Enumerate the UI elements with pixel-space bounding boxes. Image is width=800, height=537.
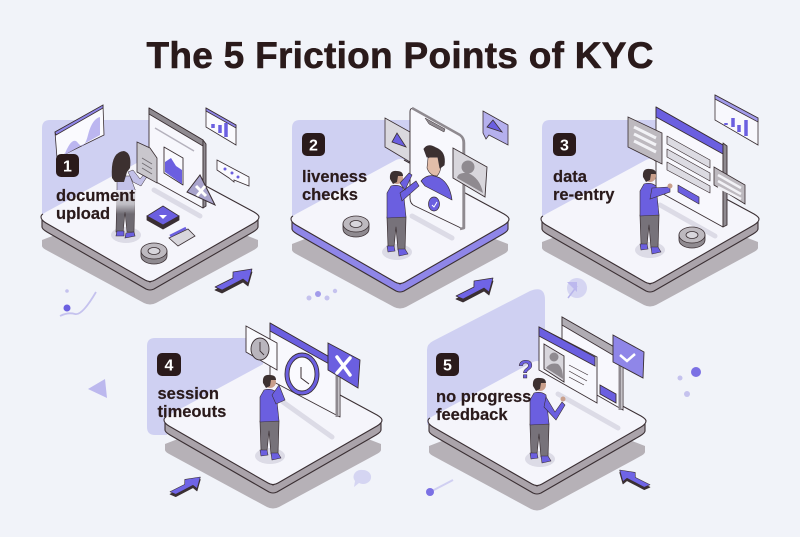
icon: chat bubble (217, 160, 249, 186)
platform 1 (41, 157, 259, 304)
arrow 5 (620, 470, 650, 490)
phone with face (410, 108, 464, 229)
step 3 badge (553, 133, 576, 156)
panel: step 5 no progress feedback (427, 289, 650, 510)
step 4 label: session (158, 385, 219, 403)
check badge (428, 197, 440, 211)
step 2 label (302, 168, 367, 204)
panel: step 1 document upload (41, 105, 259, 304)
step 3 badge: 3 (560, 138, 569, 154)
decoration: dots (306, 289, 337, 300)
icon: left form card (628, 117, 662, 164)
lavender backdrop 5 (427, 289, 545, 425)
step 1 label (56, 187, 135, 223)
window with clock (270, 323, 340, 417)
icon: ring 3 (679, 227, 705, 248)
front profile window (539, 327, 597, 403)
figure: man with question (518, 356, 566, 467)
user portrait (421, 146, 452, 200)
decoration: pie shape (567, 278, 587, 298)
lavender backdrop 2 (292, 120, 410, 222)
icon: image scan card (385, 118, 410, 162)
arm (650, 187, 670, 199)
shadow under form (660, 205, 715, 236)
platform 3 (541, 159, 759, 306)
decoration: dots right (678, 367, 701, 397)
step 5 label: feedback (436, 406, 508, 424)
icon: small clock card (246, 326, 277, 370)
step 4 badge: 4 (165, 358, 174, 374)
panel: step 3 data re-entry (541, 95, 759, 306)
step 4 badge (157, 353, 181, 376)
icon: X card (328, 343, 360, 388)
arrow 1 (215, 269, 252, 293)
shadow under window (283, 402, 332, 437)
arm (272, 385, 285, 404)
step 4 label (158, 385, 226, 421)
step 2 label: checks (302, 186, 358, 204)
step 5 badge: 5 (443, 358, 452, 374)
icon: ring 2 (343, 216, 369, 237)
decoration: bubble (353, 470, 371, 487)
icon: floating area chart (55, 105, 104, 158)
platform 2 (291, 159, 509, 308)
platform 4 (164, 360, 382, 508)
icon: bar card (206, 108, 236, 145)
step 5 label (436, 388, 531, 424)
platform 5 (428, 361, 646, 510)
lavender backdrop 3 (542, 120, 656, 218)
icon: browser window with image (149, 108, 206, 208)
step 3 label: data (553, 168, 588, 186)
step 1 label: document (56, 187, 135, 205)
question mark: ? (518, 356, 533, 384)
shadow under windows (558, 394, 618, 428)
icon: profile card (453, 148, 487, 197)
figure: man thinking (255, 375, 285, 464)
arrow 4 (170, 477, 200, 497)
lavender backdrop 4 (147, 338, 263, 435)
icon: purple upload tile (147, 206, 179, 229)
step 2 label: liveness (302, 168, 367, 186)
panel: step 2 liveness checks (291, 108, 509, 308)
icon: error triangle (187, 175, 215, 205)
shadow under browser (154, 190, 200, 216)
icon: bar chart card (715, 95, 758, 145)
step 3 label (553, 168, 615, 204)
title: The 5 Friction Points of KYC (146, 35, 654, 76)
step 5 badge (436, 353, 459, 376)
figure: man at form (635, 169, 672, 258)
icon: small tile (169, 228, 195, 246)
step 2 badge (302, 133, 325, 156)
clock (285, 353, 319, 395)
icon: right form card (714, 167, 745, 204)
icon: document (137, 142, 157, 183)
icon: photo card (483, 111, 508, 145)
arrow 2 (456, 278, 493, 302)
panel: step 4 session timeouts (147, 323, 382, 508)
decoration: triangle (88, 379, 107, 398)
decoration: slider (426, 480, 453, 496)
step 4 label: timeouts (158, 403, 226, 421)
icon: check card (613, 335, 644, 378)
figure: man pointing (382, 171, 419, 260)
icon: ring 1 (141, 243, 167, 264)
arm (400, 173, 419, 201)
step 1 label: upload (56, 205, 110, 223)
step 5 label: no progress (436, 388, 531, 406)
step 1 badge (56, 154, 79, 177)
form window (656, 107, 727, 227)
lavender backdrop 1 (42, 120, 150, 218)
fade over figure (115, 190, 137, 214)
shadow under phone (412, 216, 452, 238)
step 3 label: re-entry (553, 186, 615, 204)
step 1 badge: 1 (63, 158, 72, 176)
back window (562, 317, 623, 410)
figure: woman uploading (111, 151, 148, 243)
arm (544, 397, 565, 420)
step 2 badge: 2 (309, 138, 318, 154)
decoration: line and dots left (60, 289, 96, 316)
